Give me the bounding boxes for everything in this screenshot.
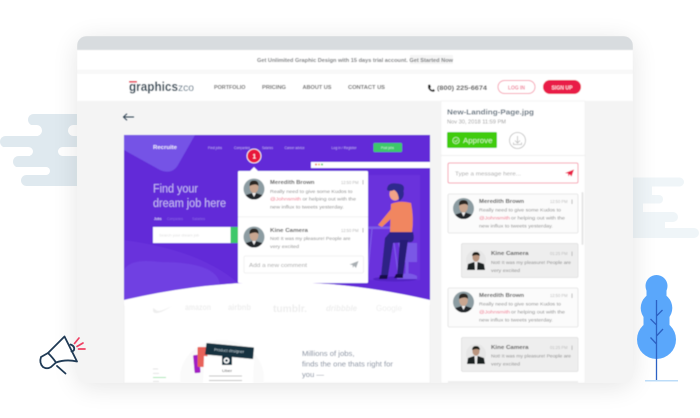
popup comment: Kine Camera: Kine Camera <box>270 228 309 234</box>
button: sign up: SIGN UP <box>552 85 573 91</box>
popup comment: Kine Camera: very excited <box>270 244 299 250</box>
hero navigation: Find jobs <box>208 146 222 150</box>
popup comment: Meredith Brown <box>244 178 364 210</box>
file date: Nov 30, 2018 11:59 PM <box>447 120 507 126</box>
comment: Meredith Brown repeat: new influx to tweets yesterday. <box>479 317 553 323</box>
comment: Meredith Brown: @Johnsmith <box>479 216 510 222</box>
promo strip: Get Unlimited Graphic Design with 15 days trial account. Get Started Now <box>257 58 454 64</box>
comment: Meredith Brown: 12:50 PM <box>550 199 568 204</box>
popup comment: Kine Camera <box>244 226 364 250</box>
hero navigation <box>153 143 402 152</box>
section text: you — <box>302 370 324 379</box>
button: sign up <box>543 80 581 94</box>
icon: back arrow <box>124 114 134 120</box>
reply: Kine Camera <box>462 244 578 278</box>
job cards illustration <box>192 342 255 382</box>
section text: finds the one thats right for <box>302 360 394 368</box>
comment: Meredith Brown repeat: Really need to give some Kudos to <box>479 301 561 307</box>
top navigation: PRICING <box>262 85 286 91</box>
popup comment: Kine Camera: 12:50 PM <box>341 228 359 233</box>
section text: Millions of jobs, <box>302 349 354 358</box>
comment: Meredith Brown <box>448 194 578 233</box>
button: log in: LOG IN <box>508 85 525 91</box>
hero heading <box>153 184 226 210</box>
popup comment: Meredith Brown: 12:50 PM <box>341 180 359 185</box>
hero heading: Find your <box>153 184 198 196</box>
hero navigation: Recruite <box>153 145 177 151</box>
popup comment: Meredith Brown: @Johnsmith <box>270 196 301 202</box>
logo: graphics <box>129 79 178 94</box>
comment: Meredith Brown: Really need to give some Kudos to <box>479 208 561 214</box>
search tabs: Jobs <box>154 217 162 221</box>
reply: Kine Camera repeat: very excited <box>491 362 520 368</box>
reply: Kine Camera: 01:25 PM <box>550 251 568 256</box>
hero navigation: Salaries <box>262 146 273 150</box>
reply: Kine Camera repeat: 01:25 PM <box>550 345 568 350</box>
logo: zco <box>178 82 194 94</box>
top navigation: (800) 225-6674 <box>437 85 487 92</box>
popup comment: Kine Camera: Not! It was my pleasure! People are <box>270 236 351 242</box>
hero navigation: Post jobs <box>381 146 394 150</box>
background cloud: right <box>625 178 699 238</box>
reply: Kine Camera repeat: Not! It was my pleasure! People are <box>491 354 571 360</box>
search box <box>153 227 240 243</box>
message input <box>448 163 578 183</box>
hero navigation: Log in / Register <box>332 146 357 150</box>
search box: Search your dream job <box>159 234 199 238</box>
search tabs <box>154 217 205 221</box>
background cloud: left <box>0 114 88 186</box>
reply: Kine Camera repeat <box>462 338 578 372</box>
comment: Meredith Brown: Meredith Brown <box>479 199 524 205</box>
comment popup <box>238 149 368 283</box>
partner logos: tumblr. <box>273 304 307 315</box>
popup comment: Meredith Brown: Meredith Brown <box>270 180 315 186</box>
person illustration <box>367 183 417 282</box>
scrollbar <box>582 192 584 245</box>
icon: megaphone <box>40 336 85 374</box>
approve button: Approve <box>463 136 492 145</box>
partner logos: dribbble <box>326 303 357 313</box>
approve button <box>447 132 497 148</box>
hero heading: dream job here <box>153 198 226 210</box>
partner logos: Google <box>376 303 402 313</box>
partner logos: airbnb <box>228 302 251 312</box>
search tabs: Salaries <box>192 217 205 221</box>
review side panel <box>441 101 585 385</box>
message input: Type a message here... <box>455 171 521 177</box>
search tabs: Companies <box>167 217 183 221</box>
icon: download <box>510 132 526 148</box>
comment: Meredith Brown repeat: @Johnsmith <box>479 309 510 315</box>
comment: Meredith Brown: or helping out with the <box>511 216 565 222</box>
reply: Kine Camera: very excited <box>491 268 520 274</box>
comment: Meredith Brown repeat <box>448 288 578 327</box>
add comment input: Add a new comment <box>249 263 307 269</box>
landing page preview <box>124 135 430 416</box>
comment: Meredith Brown repeat: 12:50 PM <box>550 293 568 298</box>
hero navigation: Companies <box>234 146 250 150</box>
comment: Meredith Brown: new influx to tweets yesterday. <box>479 224 553 230</box>
promo strip <box>78 50 632 70</box>
partner logos: amazon <box>185 302 211 312</box>
mini list <box>153 368 166 382</box>
job cards illustration: Product designer <box>214 347 245 354</box>
button: log in <box>498 80 535 94</box>
top navigation: CONTACT US <box>348 85 386 91</box>
browser mini bar <box>311 162 430 168</box>
badge: 1 <box>253 154 257 160</box>
reply: Kine Camera repeat: Kine Camera <box>491 345 530 351</box>
reply: Kine Camera: Kine Camera <box>491 251 530 257</box>
file title: New-Landing-Page.jpg <box>447 107 534 116</box>
icon: tree <box>637 275 678 382</box>
comment: Meredith Brown repeat: or helping out with the <box>511 309 565 315</box>
card shadow <box>77 40 633 387</box>
job cards illustration: Uber <box>222 368 233 373</box>
top navigation: PORTFOLIO <box>214 85 246 91</box>
partner logos <box>153 304 402 313</box>
hero navigation: Career advice <box>284 146 304 150</box>
browser card <box>77 36 633 416</box>
popup comment: Meredith Brown: new influx to tweets yesterday. <box>270 204 344 210</box>
popup comment: Meredith Brown: or helping out with the <box>302 196 356 202</box>
top navigation: ABOUT US <box>302 85 332 91</box>
section text <box>302 349 394 379</box>
comment: Meredith Brown repeat: Meredith Brown <box>479 293 524 299</box>
browser title bar <box>77 36 633 50</box>
icon: phone <box>428 84 435 92</box>
reply: Kine Camera: Not! It was my pleasure! People are <box>491 260 571 266</box>
purple hero <box>124 135 430 305</box>
top navigation <box>77 74 633 101</box>
popup comment: Meredith Brown: Really need to give some Kudos to <box>270 189 353 195</box>
